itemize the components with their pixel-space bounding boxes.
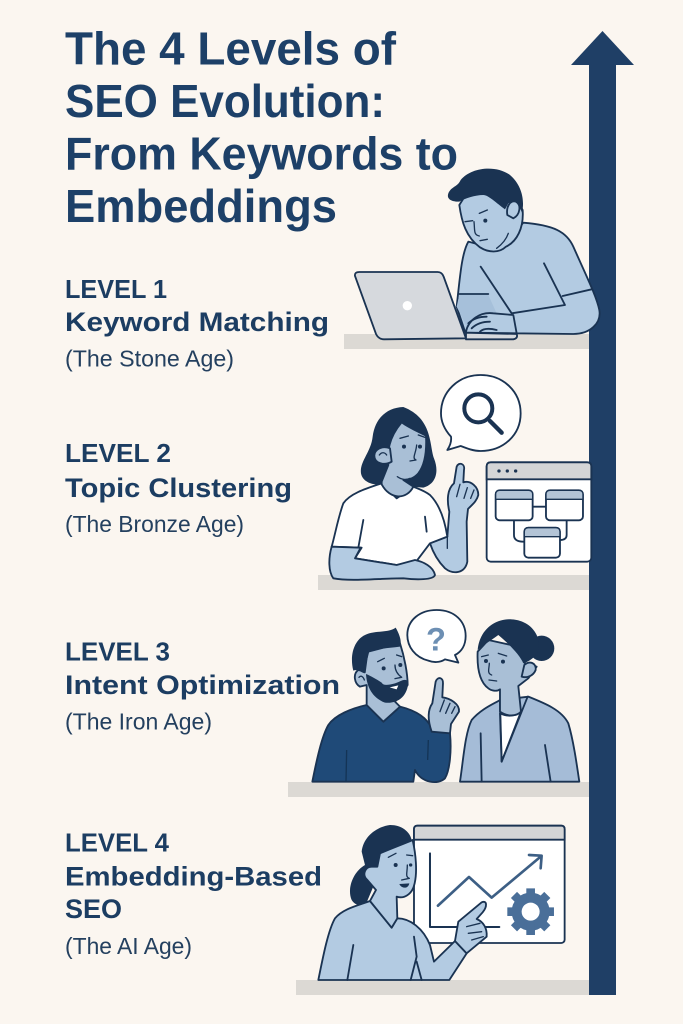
level 3 text: LEVEL 3	[65, 636, 170, 666]
level 2 text	[65, 438, 292, 537]
laptop	[355, 272, 517, 339]
level 1 shelf	[344, 334, 589, 349]
man sweater	[312, 705, 451, 782]
level 3 shelf	[288, 782, 589, 797]
woman hand	[455, 902, 487, 953]
speech bubble: question: ?	[426, 621, 446, 658]
speech bubble: search	[441, 375, 521, 451]
man body	[457, 223, 600, 334]
man head	[448, 169, 523, 251]
window: cluster diagram	[487, 462, 591, 562]
woman face	[374, 422, 426, 496]
woman torso and arm	[318, 901, 467, 980]
woman arm and hand	[430, 464, 478, 572]
woman torso	[329, 483, 447, 580]
level 2 text: LEVEL 2	[65, 438, 171, 468]
woman face	[364, 840, 416, 928]
level 4 text: LEVEL 4	[65, 828, 170, 858]
illustration: woman with search and diagram	[329, 375, 591, 580]
level 1 text: (The Stone Age)	[65, 346, 234, 372]
woman head	[478, 619, 554, 715]
title: From Keywords to	[65, 128, 458, 180]
illustration: man at laptop	[355, 169, 600, 339]
level 1 text	[65, 274, 329, 372]
illustration: woman presenting chart	[318, 825, 565, 980]
man hand	[429, 678, 459, 733]
level 4 text: SEO	[65, 894, 122, 924]
level 3 text: (The Iron Age)	[65, 708, 212, 734]
level 4 shelf	[296, 980, 589, 995]
woman body	[460, 697, 579, 782]
woman hair	[361, 407, 436, 488]
title	[65, 22, 458, 232]
progress arrow	[571, 31, 634, 995]
level 4 text: (The AI Age)	[65, 933, 192, 959]
level 3 text	[65, 636, 340, 734]
chart window	[414, 826, 565, 943]
speech bubble: question	[407, 610, 466, 663]
illustration: two people talking	[312, 610, 579, 782]
title: Embeddings	[65, 180, 337, 232]
icon: gear	[507, 888, 554, 935]
man head	[352, 628, 408, 722]
woman hair	[350, 825, 412, 905]
title: SEO Evolution:	[65, 75, 385, 127]
level 2 text: Topic Clustering	[65, 473, 292, 503]
level 4 text: Embedding-Based	[65, 862, 322, 892]
level 3 text: Intent Optimization	[65, 670, 340, 700]
level 1 text: LEVEL 1	[65, 274, 167, 304]
level 4 text	[65, 828, 322, 959]
level 2 text: (The Bronze Age)	[65, 511, 244, 537]
level 1 text: Keyword Matching	[65, 307, 329, 337]
level 2 shelf	[318, 575, 589, 590]
title: The 4 Levels of	[65, 22, 397, 74]
